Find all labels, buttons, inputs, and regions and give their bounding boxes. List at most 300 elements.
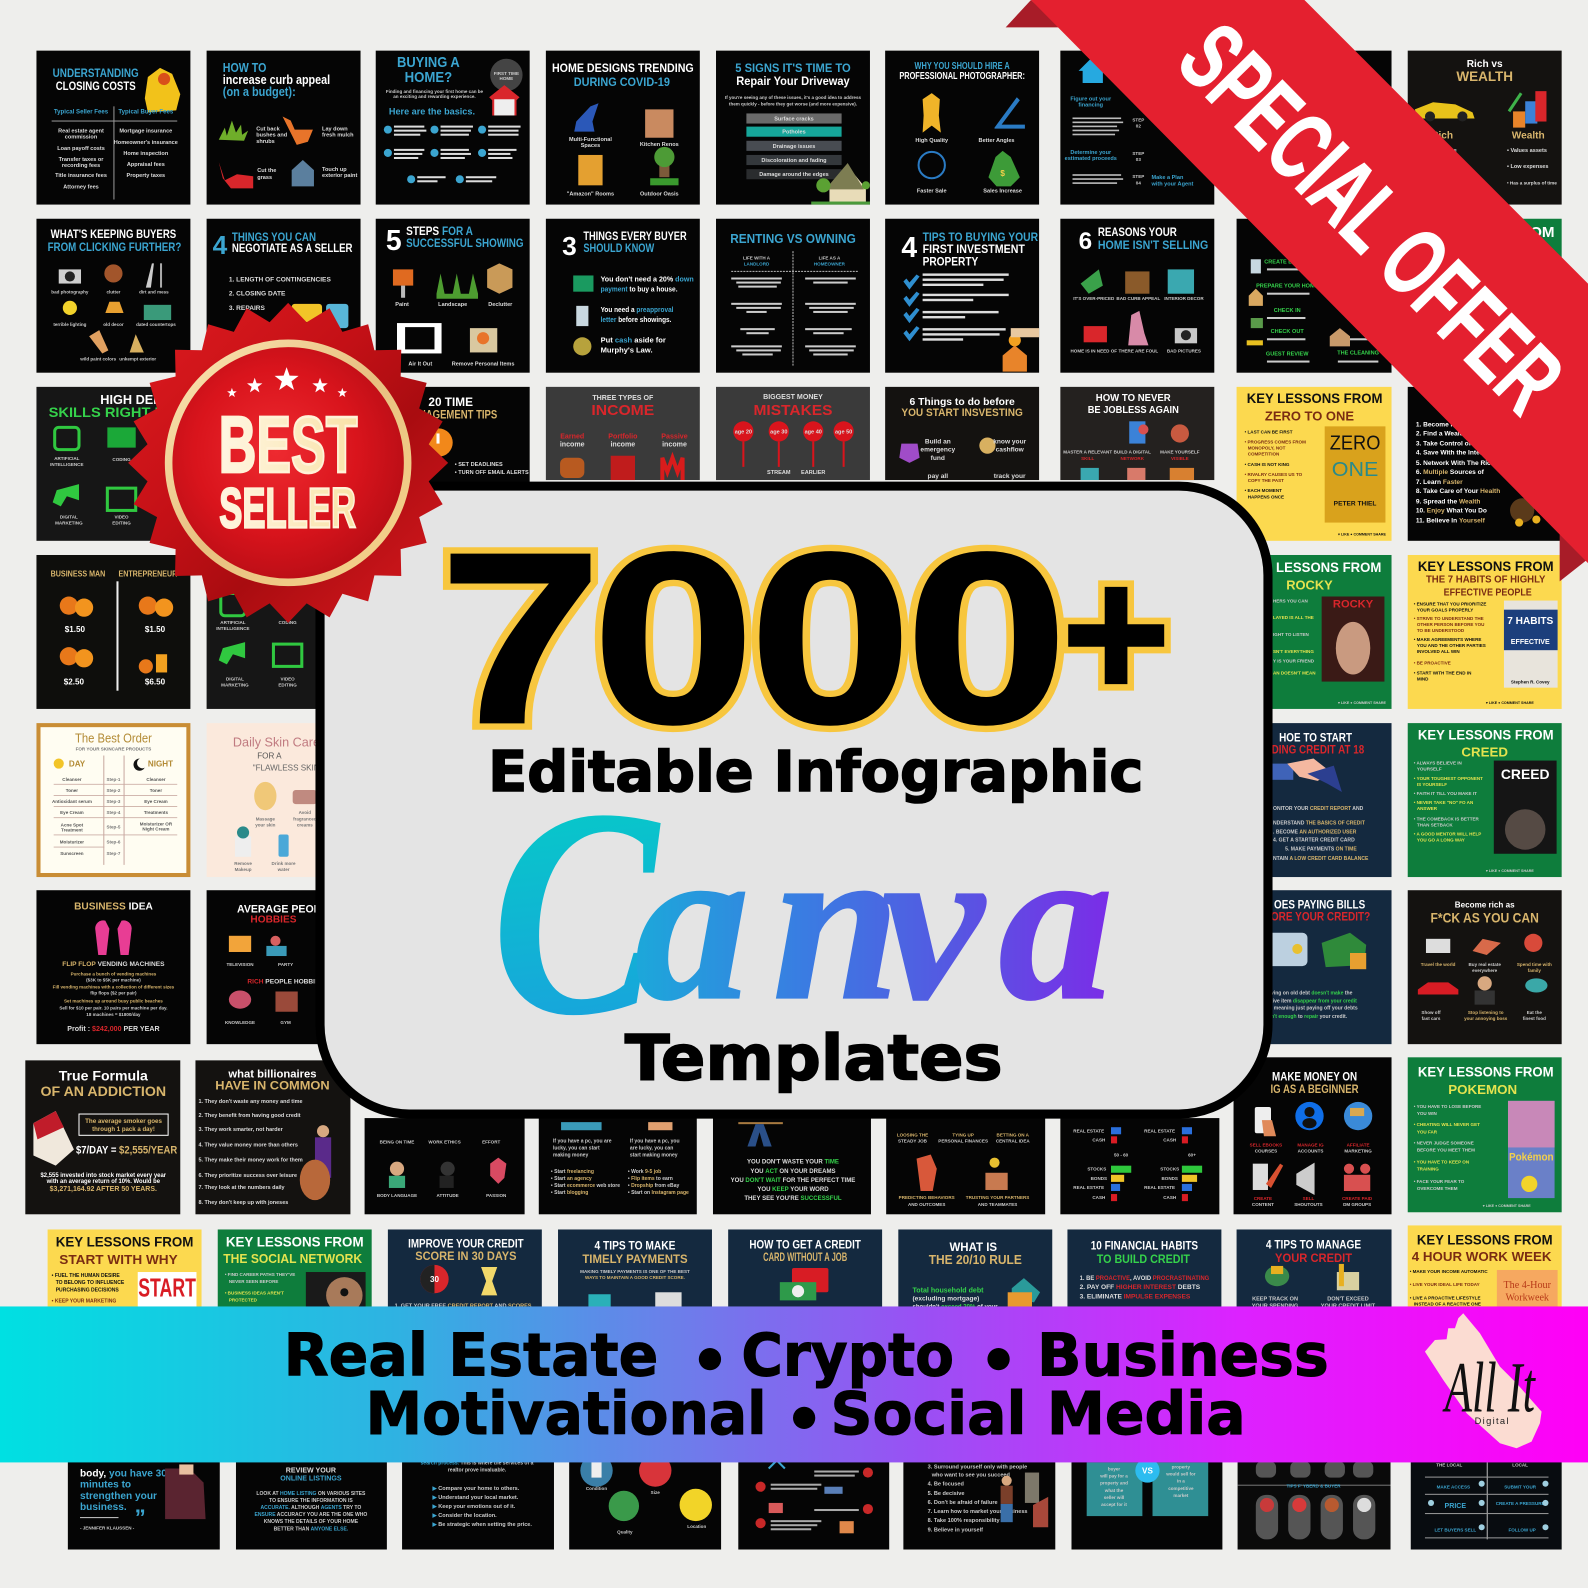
card: negotiate as a seller: 4 bbox=[213, 230, 228, 260]
card: zero to one: • EACH MOMENT bbox=[1245, 488, 1282, 493]
card: steady job vs central idea: AND OUTCOMES bbox=[908, 1202, 945, 1207]
card: business idea: Set machines up around busy public beaches bbox=[64, 999, 163, 1004]
card: closing costs: Property taxes bbox=[127, 173, 165, 179]
card: repair driveway: Drainage issues bbox=[773, 144, 815, 150]
card: asset allocation: BONDS bbox=[1091, 1176, 1107, 1181]
card: creed: YOU GO A LONG WAY bbox=[1417, 838, 1465, 843]
card: zero to one: PETER THIEL bbox=[1334, 500, 1376, 507]
badge text: BEST bbox=[219, 400, 358, 489]
card: the best order: Night Cream bbox=[142, 826, 169, 831]
card: financial habits: 1. BE PROACTIVE, AVOID PROCRASTINATING bbox=[1080, 1275, 1209, 1282]
card: successful showing: Landscape bbox=[438, 302, 467, 308]
card: buyer vs seller price: property bbox=[1172, 1464, 1191, 1469]
card: what billionaires have in common: 6. They prioritize success over leisure bbox=[198, 1173, 297, 1179]
card: formula of an addiction: $2,555 invested into stock market every year bbox=[41, 1173, 167, 1179]
card: make money on ig: CREATE bbox=[1254, 1196, 1272, 1201]
card: asset allocation: CASH bbox=[1092, 1195, 1105, 1200]
card: home is not selling bbox=[1060, 219, 1214, 373]
card: zero to one: KEY LESSONS FROM bbox=[1247, 391, 1382, 407]
card: become rich: your annoying boss bbox=[1464, 1016, 1508, 1021]
card: zero to one: • LAST CAN BE FIRST bbox=[1245, 429, 1293, 434]
card: home is not selling: INTERIOR DECOR bbox=[1164, 296, 1204, 301]
card: creed: • NEVER TAKE "NO" FO AN bbox=[1414, 800, 1473, 805]
card: never be jobless: MASTER A RELEVANT bbox=[1063, 450, 1112, 455]
card: steady job vs central idea: PERSONAL FINANCES bbox=[938, 1138, 988, 1143]
card: manage credit: YOUR CREDIT LIMIT bbox=[1321, 1303, 1376, 1309]
card: make money with a pc: • Dropship from eBay bbox=[628, 1183, 680, 1189]
card: the best order: Moisturizer OR bbox=[140, 821, 173, 826]
card: repair driveway: Discoloration and fading bbox=[761, 158, 827, 164]
card: manage credit bbox=[1237, 1229, 1392, 1321]
card: surround yourself list: who want to see you succeed bbox=[931, 1473, 1011, 1479]
card: start with why: TO BELONG TO INFLUENCE bbox=[56, 1280, 125, 1286]
logo word: Canva bbox=[492, 750, 1113, 1077]
card: buying a home: FIRST TIME bbox=[494, 71, 519, 76]
card: rich vs wealth: • Status bbox=[1420, 180, 1440, 186]
card: clicking further: clutter bbox=[106, 290, 121, 295]
card: repair driveway: Potholes bbox=[782, 130, 806, 136]
badge sunburst bbox=[128, 303, 448, 623]
card: formula of an addiction: OF AN ADDICTION bbox=[41, 1084, 166, 1100]
card: photographer: $ bbox=[1000, 169, 1005, 178]
card: high demand skills: CODING bbox=[112, 457, 131, 462]
card: steady job vs central idea bbox=[886, 1118, 1045, 1214]
card: social network: NEVER SEEN BEFORE bbox=[229, 1279, 278, 1284]
card: financial habits: 2. PAY OFF HIGHER INTEREST DEBTS bbox=[1080, 1284, 1201, 1291]
card: does paying bills restore credit: TORE YOUR CREDIT? bbox=[1265, 910, 1370, 924]
card: successful showing bbox=[376, 219, 530, 373]
card: improve your credit score bbox=[388, 1229, 542, 1321]
card: rocky: ROCKY bbox=[1333, 599, 1374, 611]
card: selling steps bbox=[1060, 51, 1214, 205]
card: quote jennifer klaussen bbox=[68, 1458, 220, 1550]
card: business idea: flip flops ($2 per pair) bbox=[90, 991, 137, 996]
card: strategic pricing: realtor prove invaluable. bbox=[448, 1468, 507, 1474]
card: does paying bills restore credit: n't enough to repair your credit. bbox=[1271, 1014, 1348, 1020]
card: before investing: 6 Things to do before bbox=[909, 397, 1015, 408]
card: renting vs owning: LANDLORD bbox=[744, 261, 770, 266]
card: steady job vs central idea: TYING UP bbox=[952, 1132, 974, 1137]
card: buying a home: Finding and financing your first home can be bbox=[386, 89, 484, 94]
card: money mistakes: age 30 bbox=[770, 429, 787, 435]
card: curb appeal: HOW TO bbox=[223, 60, 266, 75]
card: what billionaires have in common bbox=[195, 1060, 350, 1214]
logo word: Canva: v bbox=[882, 799, 986, 1047]
card: the best order: Step-4 bbox=[106, 810, 121, 815]
card: daily skin care: "FLAWLESS SKIN" bbox=[253, 764, 323, 773]
card: the best order: Sunscreen bbox=[60, 851, 84, 856]
card: local realtor: SUBMIT YOUR bbox=[1504, 1485, 1537, 1490]
card: make money with a pc: start making money bbox=[630, 1153, 678, 1159]
card: curb appeal: (on a budget): bbox=[223, 84, 296, 99]
card: social network: KEY LESSONS FROM bbox=[226, 1235, 364, 1251]
card: repair driveway: Repair Your Driveway bbox=[736, 74, 850, 88]
card: rocky: SN'T EVERYTHING bbox=[1273, 649, 1314, 654]
card: wealth rules: 6. Multiple Sources of bbox=[1416, 469, 1485, 476]
card: review online listings bbox=[236, 1458, 387, 1550]
card: asset allocation: CASH bbox=[1163, 1195, 1176, 1200]
card: closing costs: CLOSING COSTS bbox=[56, 79, 136, 93]
card: buyer vs seller price: will pay for a bbox=[1099, 1474, 1128, 1479]
card: successful showing: 5 bbox=[386, 225, 402, 257]
card: clicking further: dirt and mess bbox=[139, 290, 169, 295]
card: 7 habits: 7 HABITS bbox=[1507, 616, 1554, 627]
card: creed bbox=[1408, 723, 1562, 877]
card: review online listings: ONLINE LISTINGS bbox=[280, 1475, 342, 1483]
card: the best order: The Best Order bbox=[75, 730, 152, 745]
card: successful showing: SUCCESSFUL SHOWING bbox=[406, 236, 524, 250]
card: steady job vs central idea: STEADY JOB bbox=[898, 1138, 928, 1143]
card: social network: THE SOCIAL NETWORK bbox=[223, 1251, 363, 1266]
card: does paying bills restore credit: , meaning just paying off your debts bbox=[1271, 1006, 1358, 1012]
badge text bbox=[219, 400, 358, 541]
card: buyer should know: Put cash aside for bbox=[601, 335, 666, 344]
card: zero to one bbox=[1237, 387, 1392, 541]
card: closing costs: Typical Buyer Fees bbox=[118, 109, 174, 115]
card: buyer vs seller price: seller will bbox=[1104, 1495, 1124, 1500]
card: repair driveway: them quickly - before they get worse (and more expensive). bbox=[729, 101, 857, 106]
card: social network: • FIND CAREER PATHS THEY'VE bbox=[225, 1272, 295, 1277]
card: closing costs: recording fees bbox=[62, 163, 100, 169]
card: social network: • BUSINESS IDEAS AREN'T bbox=[225, 1290, 284, 1295]
card: wealth rules: 5. Network With The Rich bbox=[1416, 460, 1495, 467]
card: being on time: PASSION bbox=[486, 1193, 506, 1198]
card: closing costs: Real estate agent bbox=[58, 129, 104, 135]
logo: All It Digital bbox=[1425, 1313, 1542, 1448]
card: money mistakes bbox=[716, 387, 870, 480]
card: zero to one: • RIVALRY CAUSES US TO bbox=[1245, 472, 1303, 477]
card: hoe to start building credit: ONITOR YOUR CREDIT REPORT AND bbox=[1273, 806, 1364, 812]
card: rocky: IGHT TO LISTEN bbox=[1273, 632, 1309, 637]
card: business man vs entrepreneur: ENTREPRENEUR bbox=[118, 569, 177, 578]
card: selling steps: 03 bbox=[1136, 157, 1141, 162]
card: 7 habits: • BE PROACTIVE bbox=[1414, 660, 1451, 665]
card: asset allocation: REAL ESTATE bbox=[1073, 1185, 1104, 1190]
card: buyer should know: You need a preapproval bbox=[601, 305, 673, 314]
card: creed: ANSWER bbox=[1417, 806, 1438, 811]
card: does paying bills restore credit: ying on old debt doesn't make the bbox=[1271, 991, 1353, 997]
card: home designs: "Amazon" Rooms bbox=[567, 191, 614, 197]
card: rocky: Y IS YOUR FRIEND bbox=[1273, 658, 1315, 663]
card: start with why: START bbox=[138, 1272, 196, 1302]
card: condition size quality location: Location bbox=[687, 1524, 706, 1529]
card: pokemon: YOU FAR bbox=[1417, 1129, 1438, 1134]
card: buyer should know: THINGS EVERY BUYER bbox=[583, 229, 687, 243]
card: strategic pricing: ▶ Be strategic when setting the price. bbox=[431, 1521, 532, 1528]
card: airbnb steps: THE CLEANING bbox=[1337, 350, 1379, 356]
card: income types: INCOME bbox=[591, 402, 654, 419]
card: selling steps: 02 bbox=[1136, 124, 1141, 129]
card: zero to one: ♥ LIKE ● COMMENT SHARE bbox=[1338, 533, 1386, 537]
card: 7 habits: • STRIVE TO UNDERSTAND THE bbox=[1414, 616, 1484, 621]
card: income types: THREE TYPES OF bbox=[592, 394, 654, 402]
card: curb appeal: Cut the bbox=[257, 168, 276, 174]
card: financial habits: TO BUILD CREDIT bbox=[1097, 1252, 1190, 1266]
card: skills copy: CODING bbox=[279, 620, 297, 625]
banner text line 2: Social Media bbox=[830, 1379, 1246, 1448]
card: high demand skills: VIDEO bbox=[114, 515, 129, 520]
card: hoe to start building credit: NDERSTAND THE BASICS OF CREDIT bbox=[1273, 820, 1366, 826]
card: local realtor: MAKE ACCESS bbox=[1437, 1485, 1470, 1490]
card: local realtor: LET BUYERS SELL bbox=[1434, 1527, 1476, 1532]
card: improve your credit score: 1. GET YOUR FREE CREDIT REPORT AND SCORES. bbox=[395, 1303, 534, 1309]
card: what billionaires have in common: 8. They don't keep up with joneses bbox=[198, 1200, 288, 1206]
card: airbnb steps: PREPARE YOUR HOME bbox=[1256, 284, 1319, 290]
card: you don't waste your time: THEY SEE YOU'RE SUCCESSFUL bbox=[744, 1196, 842, 1202]
card: selling steps: STEP bbox=[1132, 174, 1144, 179]
card: wealth rules bbox=[1408, 387, 1562, 541]
card: money mistakes: age 50 bbox=[835, 429, 852, 435]
card: hoe to start building credit: HOE TO START bbox=[1279, 730, 1352, 744]
card: wealth rules: 2. Find a Wealth Mentor bbox=[1416, 430, 1490, 437]
card: strategic pricing: ▶ Keep your emotions out of it. bbox=[431, 1503, 516, 1510]
card: the best order: DAY bbox=[69, 760, 86, 769]
card: timely payments: TIMELY PAYMENTS bbox=[582, 1252, 688, 1266]
card: surround yourself list: 3. Surround yourself only with people bbox=[928, 1464, 1027, 1470]
card: zero to one: • CASH IS NOT KING bbox=[1245, 462, 1290, 467]
card: average people hobbies: TELEVISION bbox=[226, 962, 254, 967]
card: high demand skills bbox=[36, 387, 191, 541]
card: business man vs entrepreneur: $2.50 bbox=[64, 678, 85, 687]
card: rocky: LAYED IS ALL THE bbox=[1273, 615, 1314, 620]
card: never be jobless: SKILL bbox=[1081, 456, 1094, 461]
card: make money on ig: MAKE MONEY ON bbox=[1272, 1070, 1357, 1084]
banner text line 1: Crypto bbox=[741, 1320, 954, 1389]
card: quote jennifer klaussen: minutes to bbox=[80, 1480, 131, 1491]
card: quote jennifer klaussen: ” bbox=[135, 1505, 146, 1530]
card: repair driveway bbox=[716, 51, 870, 205]
card: creed: IS YOURSELF bbox=[1417, 782, 1447, 787]
card: start with why: START WITH WHY bbox=[59, 1252, 178, 1267]
card: closing costs: Attorney fees bbox=[63, 184, 99, 190]
card: what billionaires have in common: 7. They look at the numbers daily bbox=[198, 1185, 285, 1191]
card: negotiate as a seller: THINGS YOU CAN bbox=[232, 230, 316, 244]
card: photographer: High Quality bbox=[915, 138, 949, 144]
card: daily skin care: Massage bbox=[256, 816, 275, 821]
card: high demand skills: HIGH DEMAND bbox=[100, 392, 191, 407]
card: 7 habits: EFFECTIVE PEOPLE bbox=[1444, 588, 1532, 599]
card: the best order: Toner bbox=[66, 788, 78, 793]
badge ring bbox=[169, 343, 408, 582]
card: make money with a pc: If you have a pc, you bbox=[630, 1138, 680, 1144]
card: money mistakes: STREAM bbox=[767, 470, 791, 476]
card: condition size quality location: Size bbox=[651, 1490, 660, 1495]
card: airbnb steps: CHECK IN bbox=[1274, 308, 1301, 314]
central panel bbox=[320, 486, 1268, 1114]
card: asset allocation: CASH bbox=[1092, 1137, 1105, 1142]
card: wealth rules: 4. Save With the Intent bbox=[1416, 450, 1487, 457]
card: business man vs entrepreneur bbox=[36, 555, 190, 709]
card: the best order: Cleanser bbox=[62, 777, 82, 782]
card: clicking further: WHAT'S KEEPING BUYERS bbox=[51, 227, 176, 241]
card: make money on ig: IG AS A BEGINNER bbox=[1271, 1082, 1359, 1096]
card: buyer vs seller price: market bbox=[1173, 1493, 1189, 1498]
card: the best order: Moisturizer bbox=[60, 840, 84, 845]
card: 4 hour work week: The 4-Hour bbox=[1504, 1280, 1552, 1291]
card: pokemon: POKEMON bbox=[1448, 1082, 1517, 1097]
card: photographer bbox=[885, 51, 1039, 205]
logo: All It Digital: All It bbox=[1442, 1349, 1536, 1428]
card: being on time bbox=[365, 1118, 525, 1214]
card: make money with a pc: • Start an agency bbox=[551, 1176, 592, 1182]
card: selling steps: financing bbox=[1078, 102, 1104, 108]
card: renting vs owning bbox=[716, 219, 870, 373]
card: pokemon: • NEVER JUDGE SOMEONE bbox=[1414, 1140, 1474, 1145]
card: 7 habits: KEY LESSONS FROM bbox=[1418, 559, 1554, 575]
card: surround yourself list: 5. Be decisive bbox=[928, 1491, 964, 1497]
card: home is not selling: BAD PICTURES bbox=[1167, 348, 1201, 353]
card: selling steps: 04 bbox=[1136, 180, 1141, 185]
card: successful showing: Paint bbox=[395, 302, 409, 308]
card: asset allocation: 50 - 60 bbox=[1114, 1153, 1129, 1158]
card: business man vs entrepreneur: $6.50 bbox=[145, 678, 166, 687]
card: renting vs owning: HOMEOWNER bbox=[814, 261, 846, 266]
card: rocky: LESSONS FROM bbox=[1276, 560, 1381, 576]
card: make money with a pc: are lucky, you can bbox=[630, 1145, 673, 1151]
logo: All It Digital: Digital bbox=[1475, 1416, 1510, 1426]
card: curb appeal bbox=[207, 51, 361, 205]
card: home designs: Multi-Functional bbox=[569, 137, 612, 143]
card: rich vs wealth: Wealth bbox=[1512, 131, 1545, 142]
card: before investing: Build an bbox=[925, 439, 951, 446]
card: photographer: Better Angles bbox=[979, 138, 1015, 144]
card: make money on ig: CONTENT bbox=[1252, 1202, 1274, 1207]
card: steady job vs central idea: TRUSTING YOUR PARTNERS bbox=[966, 1195, 1029, 1200]
card: strategic pricing: ▶ Compare your home to others. bbox=[431, 1485, 520, 1492]
card: clicking further: old decor bbox=[103, 322, 124, 327]
card: closing costs: Home inspection bbox=[123, 151, 169, 157]
card: high demand skills: SKILLS RIGHT NOW bbox=[49, 405, 191, 421]
card: business idea: Profit : $242,000 PER YEAR bbox=[67, 1025, 160, 1033]
card: make money on ig: CREATE PAID bbox=[1342, 1196, 1373, 1201]
card: the best order: Treatment bbox=[61, 827, 83, 832]
card: 20/10 rule: WHAT IS bbox=[949, 1240, 997, 1254]
heading: templates: Templates bbox=[625, 1022, 1003, 1095]
card: time management tips: • SET DEADLINES bbox=[455, 462, 503, 468]
badge text: SELLER bbox=[219, 478, 356, 541]
card: asset allocation: BONDS bbox=[1162, 1176, 1178, 1181]
card: local realtor: PRICE bbox=[1445, 1502, 1466, 1510]
banner text line 1: Real Estate bbox=[284, 1320, 658, 1389]
card: social network: PROTECTED bbox=[229, 1297, 258, 1302]
card: business man vs entrepreneur: $1.50 bbox=[65, 625, 86, 634]
card: 20/10 rule: (excluding mortgage) bbox=[912, 1295, 979, 1302]
card: 20/10 rule: Total household debt bbox=[912, 1286, 984, 1294]
card: wealth rules: 7. Learn Faster bbox=[1416, 479, 1463, 486]
card: pokemon: OVERCOME THEM bbox=[1417, 1186, 1458, 1191]
card: daily skin care: Remove bbox=[234, 861, 252, 866]
card: never be jobless: MAKE YOURSELF bbox=[1160, 450, 1200, 455]
card: 4 hour work week: Workweek bbox=[1505, 1292, 1550, 1303]
card: photographer: WHY YOU SHOULD HIRE A bbox=[915, 61, 1010, 72]
card: home designs: DURING COVID-19 bbox=[574, 75, 670, 89]
card: business idea: 18 machines = $1800/day bbox=[86, 1012, 141, 1017]
card: average people hobbies: AVERAGE PEOPLE bbox=[237, 903, 334, 915]
card: 4 hour work week bbox=[1408, 1225, 1562, 1321]
card: asset allocation: 60+ bbox=[1188, 1153, 1196, 1158]
card: make money with a pc: • Flip items to earn bbox=[628, 1176, 673, 1182]
card: money mistakes: MISTAKES bbox=[753, 402, 832, 419]
card: 7 habits: Stephen R. Covey bbox=[1511, 680, 1550, 685]
card: before investing: cashflow bbox=[996, 447, 1025, 454]
card: rich vs wealth: • Low expenses bbox=[1507, 164, 1549, 170]
card: zero to one: HAPPENS ONCE bbox=[1248, 494, 1284, 499]
card: clicking further: terrible lighting bbox=[53, 322, 87, 327]
card: being on time: BODY LANGUAGE bbox=[377, 1193, 417, 1198]
card: buyer should know: You don't need a 20% down bbox=[601, 275, 694, 284]
card: income types bbox=[546, 387, 700, 480]
card: income types: income bbox=[610, 441, 635, 449]
card: hoe to start building credit: NTAIN A LOW CREDIT CARD BALANCE bbox=[1273, 856, 1369, 862]
ribbon band bbox=[1031, 0, 1588, 563]
card: become rich: Become rich as bbox=[1455, 900, 1515, 909]
card: before investing: fund bbox=[931, 455, 945, 462]
card: closing costs: Mortgage insurance bbox=[119, 129, 172, 135]
banner text line 1: Business bbox=[1037, 1320, 1329, 1389]
card: buyer vs seller price: would sell for bbox=[1165, 1472, 1196, 1477]
card: skills copy: EDITING bbox=[278, 683, 297, 688]
card: 7 habits: • ENSURE THAT YOU PRIORITIZE bbox=[1414, 602, 1486, 607]
card: formula of an addiction: with an average return of 10%. Would be bbox=[46, 1179, 161, 1185]
card: formula of an addiction: The average smoker goes bbox=[85, 1118, 162, 1125]
card: never be jobless: BE JOBLESS AGAIN bbox=[1088, 405, 1179, 416]
card: local realtor bbox=[1411, 1458, 1562, 1550]
card: clicking further: unkempt exterior bbox=[119, 357, 156, 362]
card: average people hobbies: PARTY bbox=[278, 962, 293, 967]
card: home designs: Outdoor Oasis bbox=[640, 191, 679, 197]
card: creed: CREED bbox=[1501, 767, 1550, 783]
card: income types: Passive bbox=[661, 433, 688, 441]
card: make money with a pc: lucky, you can start bbox=[553, 1145, 600, 1151]
card: business idea: ($3K to $5K per machine) bbox=[86, 977, 141, 982]
card: home is not selling: HOME IS IN NEED OF bbox=[1071, 348, 1117, 353]
card: selling steps: Make a Plan bbox=[1152, 175, 1184, 181]
card: local realtor: FOLLOW UP bbox=[1509, 1527, 1536, 1532]
card: formula of an addiction: True Formula bbox=[59, 1069, 148, 1085]
card: rocky bbox=[1237, 555, 1392, 709]
card: the best order: Step-6 bbox=[106, 840, 121, 845]
card: selling steps: Determine your bbox=[1070, 150, 1112, 156]
card: average people hobbies: RICH PEOPLE HOBBIES bbox=[247, 978, 324, 985]
card: photographer: Sales Increase bbox=[983, 188, 1022, 194]
card: asset allocation: CASH bbox=[1163, 1137, 1176, 1142]
card: make money on ig: MANAGE IG bbox=[1297, 1142, 1324, 1147]
card: high demand skills: MARKETING bbox=[55, 521, 83, 526]
card: selling steps: STEP bbox=[1132, 118, 1144, 123]
card: airbnb steps bbox=[1237, 219, 1392, 373]
card: business idea bbox=[36, 890, 190, 1044]
card: buyer vs seller price: accept for it bbox=[1101, 1502, 1127, 1507]
card: wealth rules: 3. Take Control of Your bbox=[1416, 441, 1488, 448]
card: money mistakes: BIGGEST MONEY bbox=[763, 393, 823, 401]
card: creed: KEY LESSONS FROM bbox=[1418, 727, 1554, 743]
card: the best order: Step-5 bbox=[106, 824, 121, 829]
card: hoe to start building credit bbox=[1237, 723, 1392, 877]
logo word: Canva: n bbox=[772, 799, 900, 1047]
card: being on time: EFFORT bbox=[482, 1139, 501, 1144]
card: start with why: PURCHASING DECISIONS bbox=[56, 1287, 119, 1293]
card: you don't waste your time: YOU KEEP YOUR WORD bbox=[757, 1187, 829, 1193]
card: financial habits: 10 FINANCIAL HABITS bbox=[1091, 1239, 1198, 1253]
card: become rich: family bbox=[1528, 968, 1541, 973]
card: income types: income bbox=[662, 441, 687, 449]
badge stars bbox=[227, 367, 347, 397]
card: the best order: Step-7 bbox=[106, 851, 121, 856]
card: time management tips bbox=[376, 387, 530, 541]
card: negotiate as a seller: 3. REPAIRS bbox=[229, 305, 266, 312]
card: asset allocation: REAL ESTATE bbox=[1073, 1128, 1104, 1133]
logo word: Canva: a bbox=[999, 799, 1113, 1047]
